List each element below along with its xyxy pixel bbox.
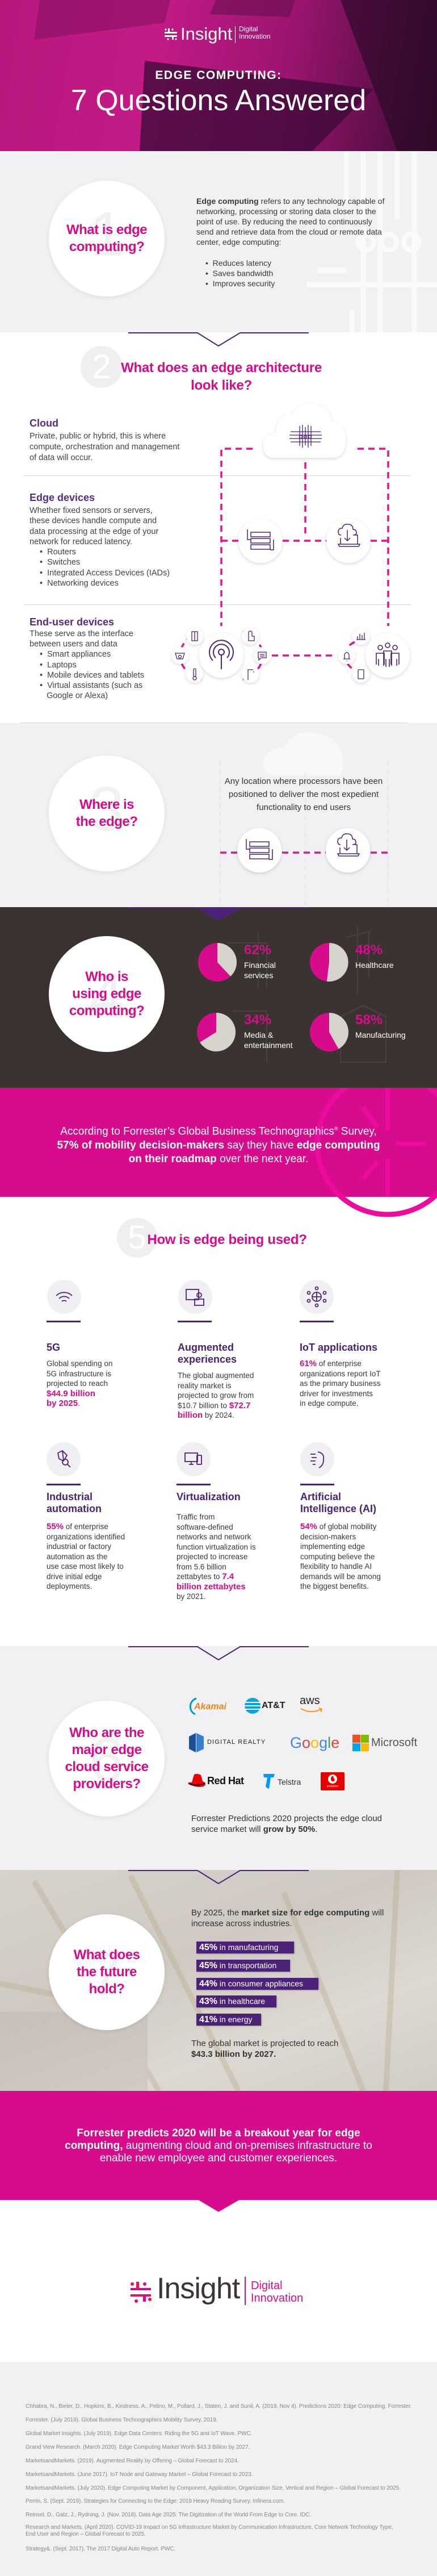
text: Perrin, S. (Sept. 2019). Strategies for Connecting to the Edge: 2019 Heavy Reading Survey. Infinera.com. [26,2498,285,2504]
circle title 1: computing? [69,239,144,254]
card: industrial: organizations identified [47,1533,125,1540]
bars: industries: 45% in manufacturing [199,1943,278,1952]
stat: manufacturing [355,1012,406,1039]
card: iot: IoT applications [300,1342,377,1353]
card: virtualization: projected to increase [177,1552,247,1561]
callout band: forrester survey: on their roadmap over the next year. [129,1153,308,1165]
card: iot: driver for investments [300,1389,373,1397]
stat: manufacturing: 58% [355,1012,383,1028]
card: ai: flexibility to handle AI [300,1562,372,1571]
stat: healthcare [355,942,394,970]
text: definition: • Reduces latency [205,258,271,268]
text: global market: $43.3 billion by 2027. [191,2049,276,2059]
heading 2 [121,360,322,393]
text: definition: networking, processing or storing data closer to the [196,207,376,216]
section 2: architecture [0,332,437,723]
logo google: Google [290,1734,339,1751]
text: cloud: Private, public or hybrid, this is where [30,432,166,441]
text: MarketsandMarkets. (2019). Augmented Reality by Offering – Global Forecast to 2024. [26,2458,239,2464]
card: 5G: by 2025. [47,1398,80,1408]
section 1: what is edge computing [0,151,437,332]
logo: Insight footer: Digital [251,2279,283,2292]
logo red hat [188,1773,244,1787]
card: ai [300,1491,381,1590]
circle title 6: cloud service [65,1759,148,1775]
card: 5G [47,1342,112,1408]
card: 5G: projected to reach [47,1379,108,1388]
logo aws: aws [300,1694,320,1707]
text: location: Any location where processors have been [225,776,383,786]
logo microsoft [352,1735,418,1751]
circle title 3 [49,755,165,871]
icon: cloud with chip [263,404,346,458]
text: cloud: Cloud [30,417,58,429]
circle title 7 [49,1914,165,2030]
stat: financial: Financial [244,961,276,970]
stat: financial [244,942,276,980]
references [0,2362,437,2576]
bars: industries: 45% in transportation [199,1961,276,1970]
card: virtualization: software-defined [177,1522,233,1531]
card: iot [300,1342,381,1408]
section 3: where is the edge [0,723,437,907]
logo att: AT&T [262,1701,285,1710]
card: augmented: experiences [178,1354,237,1365]
section 6: providers [0,1646,437,1870]
architecture diagram [170,407,411,685]
text: Strategy&. (Sept. 2017). The 2017 Digital Auto Report. PWC. [26,2546,175,2552]
card: industrial: 55% of enterprise [47,1522,108,1531]
card: iot: organizations report IoT [300,1369,381,1378]
text: global market: The global market is projected to reach [191,2039,338,2048]
number badge 5: 5 [128,1219,146,1256]
section 7: future [0,1870,437,2091]
text: market size: By 2025, the market size for edge computing will [191,1908,384,1918]
card: 5G: Global spending on [47,1359,112,1368]
circle title 7: the future [77,1964,137,1980]
card: industrial: use case most likely to [47,1562,124,1571]
text: edge devices: data processing at the edge of your [30,527,158,536]
text: end-user devices [30,616,144,700]
text: location: positioned to deliver the most expedient [229,790,379,799]
bars: industries: 43% in healthcare [199,1997,265,2006]
text: edge devices [30,492,170,588]
text: location [225,776,383,812]
stat: manufacturing: Manufacturing [355,1030,406,1039]
text: edge devices: • Routers [40,548,76,557]
text: edge devices: these devices handle compute and [30,516,157,525]
text: cloud: compute, orchestration and management [30,442,179,452]
circle title 3: the edge? [76,814,137,829]
card: augmented: reality market is [178,1381,232,1389]
icon: cloud laptop [326,519,371,563]
circle title 3: Where is [79,797,134,812]
circle title 4: using edge [72,986,141,1001]
logo red hat: Red Hat [207,1775,244,1786]
card: virtualization: zettabytes to 7.4 [177,1572,234,1581]
circle title 7: hold? [89,1981,124,1997]
text: Chhabra, N., Bieler, D., Hopkins, B., Kindness, A., Pelino, M., Pollard, J., Staten, J. and Sunil, A. (2019, Nov 4). Predictions 2020: Edge Computing. Forrester. [26,2403,411,2410]
logo: Insight footer [131,2272,303,2305]
text: edge devices: Whether fixed sensors or servers, [30,506,153,515]
circle title 6: 6 [89,1725,124,1795]
icon: antenna hub [199,633,243,678]
card: 5G: 5G infrastructure is [47,1369,111,1378]
card: augmented: The global augmented [178,1371,254,1380]
card: virtualization: Traffic from [177,1513,215,1521]
text: end-user devices: End-user devices [30,616,114,628]
card: augmented: projected to grow from [178,1391,254,1400]
circle title 4: 4 [89,961,124,1030]
card: industrial: automation as the [47,1552,107,1561]
circle title 6: major edge [72,1742,142,1757]
circle title 1: What is edge [66,222,147,237]
text: global market [191,2039,338,2059]
card: ai: Artificial [300,1491,341,1502]
text: definition: • Saves bandwidth [205,269,273,278]
circle title 7: 7 [89,1939,124,2009]
logo: Insight hero: Digital [239,25,258,33]
hero banner [0,0,437,151]
card: virtualization: Virtualization [177,1491,241,1502]
card: augmented: billion by 2024. [178,1410,234,1420]
circle title 3: 3 [89,774,124,844]
card: virtualization: function virtualization is [177,1543,256,1551]
card: ai: demands will be among [300,1572,381,1580]
card: virtualization: from 5.6 billion [177,1562,226,1571]
stat: healthcare: Healthcare [355,961,394,970]
card: industrial: Industrial [47,1491,93,1502]
pie 34 [197,1013,236,1051]
bars: industries: 41% in energy [199,2015,253,2024]
pie charts [197,926,386,1063]
text: edge devices: • Switches [40,558,80,567]
callout band: breakout year: Forrester predicts 2020 will be a breakout year for edge [77,2127,360,2139]
card: augmented: $10.7 billion to $72.7 [178,1401,250,1410]
text: MarketsandMarkets. (June 2017). IoT Node and Gateway Market – Global Forecast to 2023. [26,2471,253,2478]
callout band: forrester survey [0,1088,437,1197]
use-case icons [47,1280,334,1485]
text: market size [191,1908,384,1928]
logo microsoft: Microsoft [371,1736,417,1749]
text: cloud: of data will occur. [30,453,93,462]
heading 2: What does an edge architecture [121,360,322,375]
icon: server [238,519,283,563]
text: location: functionality to end users [257,803,351,812]
logo: Insight footer: Insight [157,2272,239,2305]
card: ai: implementing edge [300,1542,365,1551]
callout band: breakout year: computing, augmenting cloud and on-premises infrastructure to [65,2140,372,2152]
stat: media: Media & [244,1030,273,1039]
card: iot: in edge compute. [300,1399,359,1408]
text: Reinsel, D., Gatz, J., Rydning, J. (Nov. 2018). Data Age 2025: The Digitization of the World From Edge to Core. IDC. [26,2512,311,2518]
text: definition: point of use. By reducing the need to continuously [196,217,372,226]
callout band: forrester survey: 57% of mobility decision-makers say they have edge computing [57,1139,380,1151]
logo telstra [263,1774,301,1789]
number badge 2: 2 [92,348,111,386]
text: edge devices: • Integrated Access Devices (IADs) [40,569,170,578]
heading 5: How is edge being used? [147,1232,307,1247]
text: Grand View Research. (March 2020). Edge Computing Market Worth $43.3 Billion by 2027. [26,2444,250,2450]
card: augmented [178,1342,254,1420]
card: industrial: drive initial edge [47,1572,102,1580]
decorative ring [337,1197,437,1217]
circle title 1: 1 [89,199,124,269]
text: edge devices: Edge devices [30,492,95,503]
text: edge devices: • Networking devices [40,579,119,588]
title: 7 Questions Answered [71,84,366,117]
logo vodafone: vodafone [327,1785,338,1788]
text: Global Market Insights. (July 2019). Edge Data Centers: Riding the 5G and IoT Wave. PWC. [26,2431,252,2437]
logos [188,1694,418,1790]
card: ai: 54% of global mobility [300,1522,376,1531]
logo telstra: Telstra [278,1777,301,1786]
text: end-user devices: between users and data [30,640,117,649]
number badge 5 [117,1218,157,1258]
card: industrial: deployments. [47,1582,92,1590]
pie 48 [310,943,348,982]
card: iot: 61% of enterprise [300,1359,362,1368]
text: end-user devices: Google or Alexa) [47,691,108,700]
card: ai: decision-makers [300,1533,356,1540]
card: 5G: $44.9 billion [47,1388,95,1398]
pie 62 [198,943,237,982]
circle title 1 [49,181,165,297]
logo: Insight hero: Innovation [239,32,270,40]
callout band: forrester survey: According to Forrester’s Global Business Technographics® Survey, [60,1125,377,1137]
subtitle: EDGE COMPUTING: [155,69,282,82]
circle title 6: Who are the [69,1725,144,1740]
text: definition: • Improves security [205,279,275,288]
card: ai: computing believe the [300,1552,375,1561]
stat: financial: services [244,971,273,980]
notch [128,332,309,346]
card: virtualization: billion zettabytes [177,1581,246,1592]
logo: Insight hero: Insight [180,24,232,44]
text: end-user devices: • Smart appliances [40,650,111,659]
logo akamai: Akamai [194,1702,226,1711]
logo akamai [190,1697,227,1715]
text: definition: Edge computing refers to any technology capable of [196,197,384,206]
circle title 4: computing? [69,1003,144,1018]
heading 2: look like? [191,378,252,393]
logo digital realty [189,1733,266,1752]
text: definition: send and retrieve data from the cloud or remote data [196,227,382,236]
logo aws [300,1694,322,1712]
card: virtualization: by 2021. [177,1592,206,1601]
text: definition [196,197,385,288]
text: end-user devices: • Virtual assistants (such as [40,681,142,690]
text: Research and Markets. (April 2020). COVID-19 Impact on 5G Infrastructure Market by Communication Infrastructure, Core Network Technology Type, [26,2524,393,2531]
bars: industries: 44% in consumer appliances [199,1979,303,1989]
bars: industries [196,1942,320,2027]
card: ai: Intelligence (AI) [300,1503,376,1514]
card: virtualization: networks and network [177,1533,251,1541]
card: augmented: Augmented [178,1342,234,1353]
card: ai: the biggest benefits. [300,1582,369,1590]
logo: Insight footer: Innovation [251,2292,303,2304]
stat: media: 34% [244,1012,271,1028]
text: market growth [191,1814,382,1834]
circle title 4: Who is [85,969,128,984]
stat: healthcare: 48% [355,942,383,958]
card: industrial: industrial or factory [47,1542,111,1551]
card: 5G: 5G [47,1342,60,1353]
circle title 7: What does [74,1947,140,1963]
callout band: breakout year: enable new employee and customer experiences. [100,2152,337,2164]
section 4: who is using [0,907,437,1088]
text: market growth: service market will grow by 50%. [191,1825,318,1834]
section 5: how is edge being used [117,1218,307,1258]
logo vodafone [321,1772,344,1790]
text: Forrester. (July 2019). Global Business Technographics Mobility Survey, 2019. [26,2417,217,2423]
circle title 6 [49,1701,165,1817]
text: MarketsandMarkets. (July 2020). Edge Computing Market by Component, Application, Organization Size, Vertical and Region – Global Forecast to 2025. [26,2485,401,2491]
text: end-user devices: • Mobile devices and tablets [40,671,144,680]
card: virtualization [177,1491,256,1601]
text: cloud [30,417,179,462]
logo att [245,1698,285,1714]
stat: media [244,1012,293,1050]
card: industrial: automation [47,1503,102,1514]
text: End User and Region – Global Forecast to 2025. [26,2531,146,2537]
circle title 6: providers? [73,1776,141,1792]
text: market growth: Forrester Predictions 2020 projects the edge cloud [191,1814,382,1823]
stat: financial: 62% [244,942,271,958]
callout band: breakout year [0,2091,437,2200]
card: industrial [47,1491,125,1590]
text: end-user devices: These serve as the interface [30,629,133,638]
text: edge devices: network for reduced latency. [30,537,132,546]
logo digital realty: DIGITAL REALTY [207,1739,266,1746]
circle title 4 [49,936,165,1052]
stat: media: entertainment [244,1041,293,1050]
pie 58 [310,1013,348,1051]
card: iot: as the primary business [300,1379,381,1388]
logo: Insight hero [165,24,270,44]
text: definition: center, edge computing: [196,237,281,247]
text: end-user devices: • Laptops [40,661,77,670]
text: market size: increase across industries. [191,1919,292,1928]
number badge 2 [81,346,123,388]
